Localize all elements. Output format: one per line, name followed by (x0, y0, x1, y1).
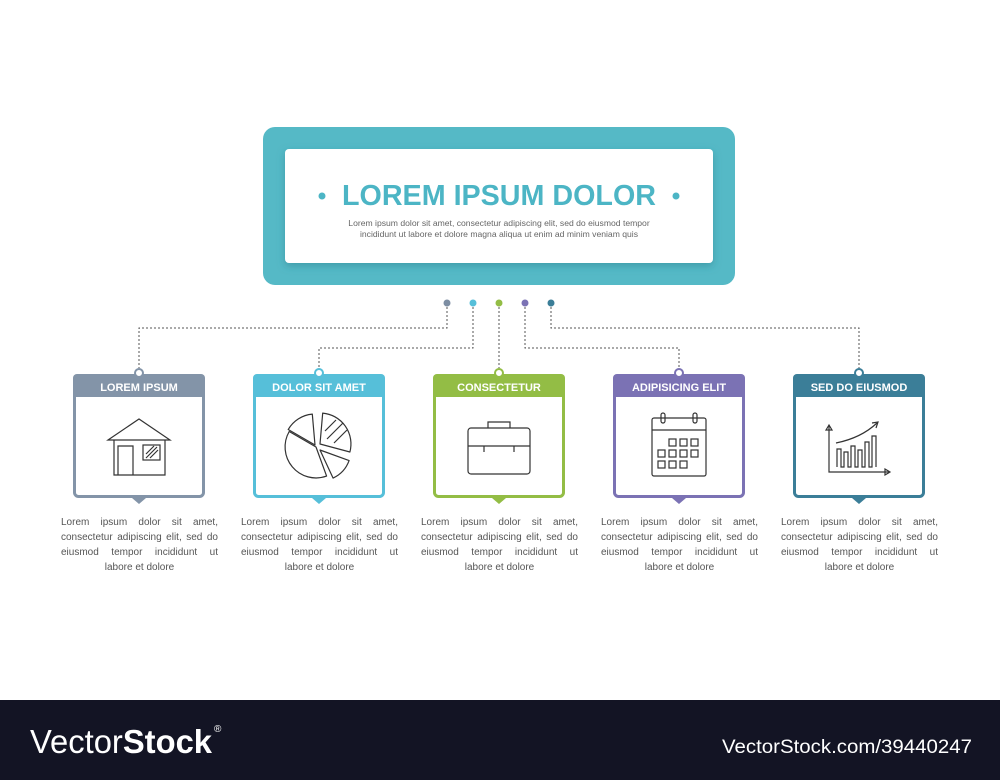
title: LOREM IPSUM DOLOR (342, 180, 656, 212)
footer bar: ® (214, 724, 222, 735)
card 4 (613, 369, 745, 504)
card 3 (433, 369, 565, 504)
card 1: LOREM IPSUM (100, 382, 178, 394)
icon: pie chart (285, 413, 351, 478)
header panel: incididunt ut labore et dolore magna aliqua ut enim ad minim veniam quis (360, 229, 638, 239)
connector dots (444, 300, 554, 306)
text: card 4: Lorem ipsum dolor sit amet, consectetur adipiscing elit, sed do eiusmod tempor incididunt ut labore et dolore (601, 517, 758, 573)
card 1 (73, 369, 205, 504)
card 5: SED DO EIUSMOD (811, 382, 907, 394)
subtitle: Lorem ipsum dolor sit amet, consectetur adipiscing elit, sed do eiusmod tempor (348, 218, 650, 228)
footer bar (0, 700, 1000, 780)
text: card 2: Lorem ipsum dolor sit amet, consectetur adipiscing elit, sed do eiusmod tempor incididunt ut labore et dolore (241, 517, 398, 573)
icon: briefcase (468, 422, 530, 474)
footer bar: VectorStock.com/39440247 (722, 737, 972, 758)
icon: calendar (652, 413, 706, 476)
connectors (139, 303, 859, 372)
card 5 (793, 369, 925, 504)
text: card 1: Lorem ipsum dolor sit amet, consectetur adipiscing elit, sed do eiusmod tempor incididunt ut labore et dolore (61, 517, 218, 573)
card 3: CONSECTETUR (457, 382, 541, 394)
card 4: ADIPISICING ELIT (632, 382, 726, 394)
icon: house (108, 419, 170, 475)
footer bar: VectorStock (30, 723, 213, 760)
card 2: DOLOR SIT AMET (272, 382, 366, 394)
icon: growth chart (826, 422, 890, 475)
text: card 3: Lorem ipsum dolor sit amet, consectetur adipiscing elit, sed do eiusmod tempor incididunt ut labore et dolore (421, 517, 578, 573)
card 2 (253, 369, 385, 504)
header panel (263, 127, 735, 285)
text: card 5: Lorem ipsum dolor sit amet, consectetur adipiscing elit, sed do eiusmod tempor incididunt ut labore et dolore (781, 517, 938, 573)
